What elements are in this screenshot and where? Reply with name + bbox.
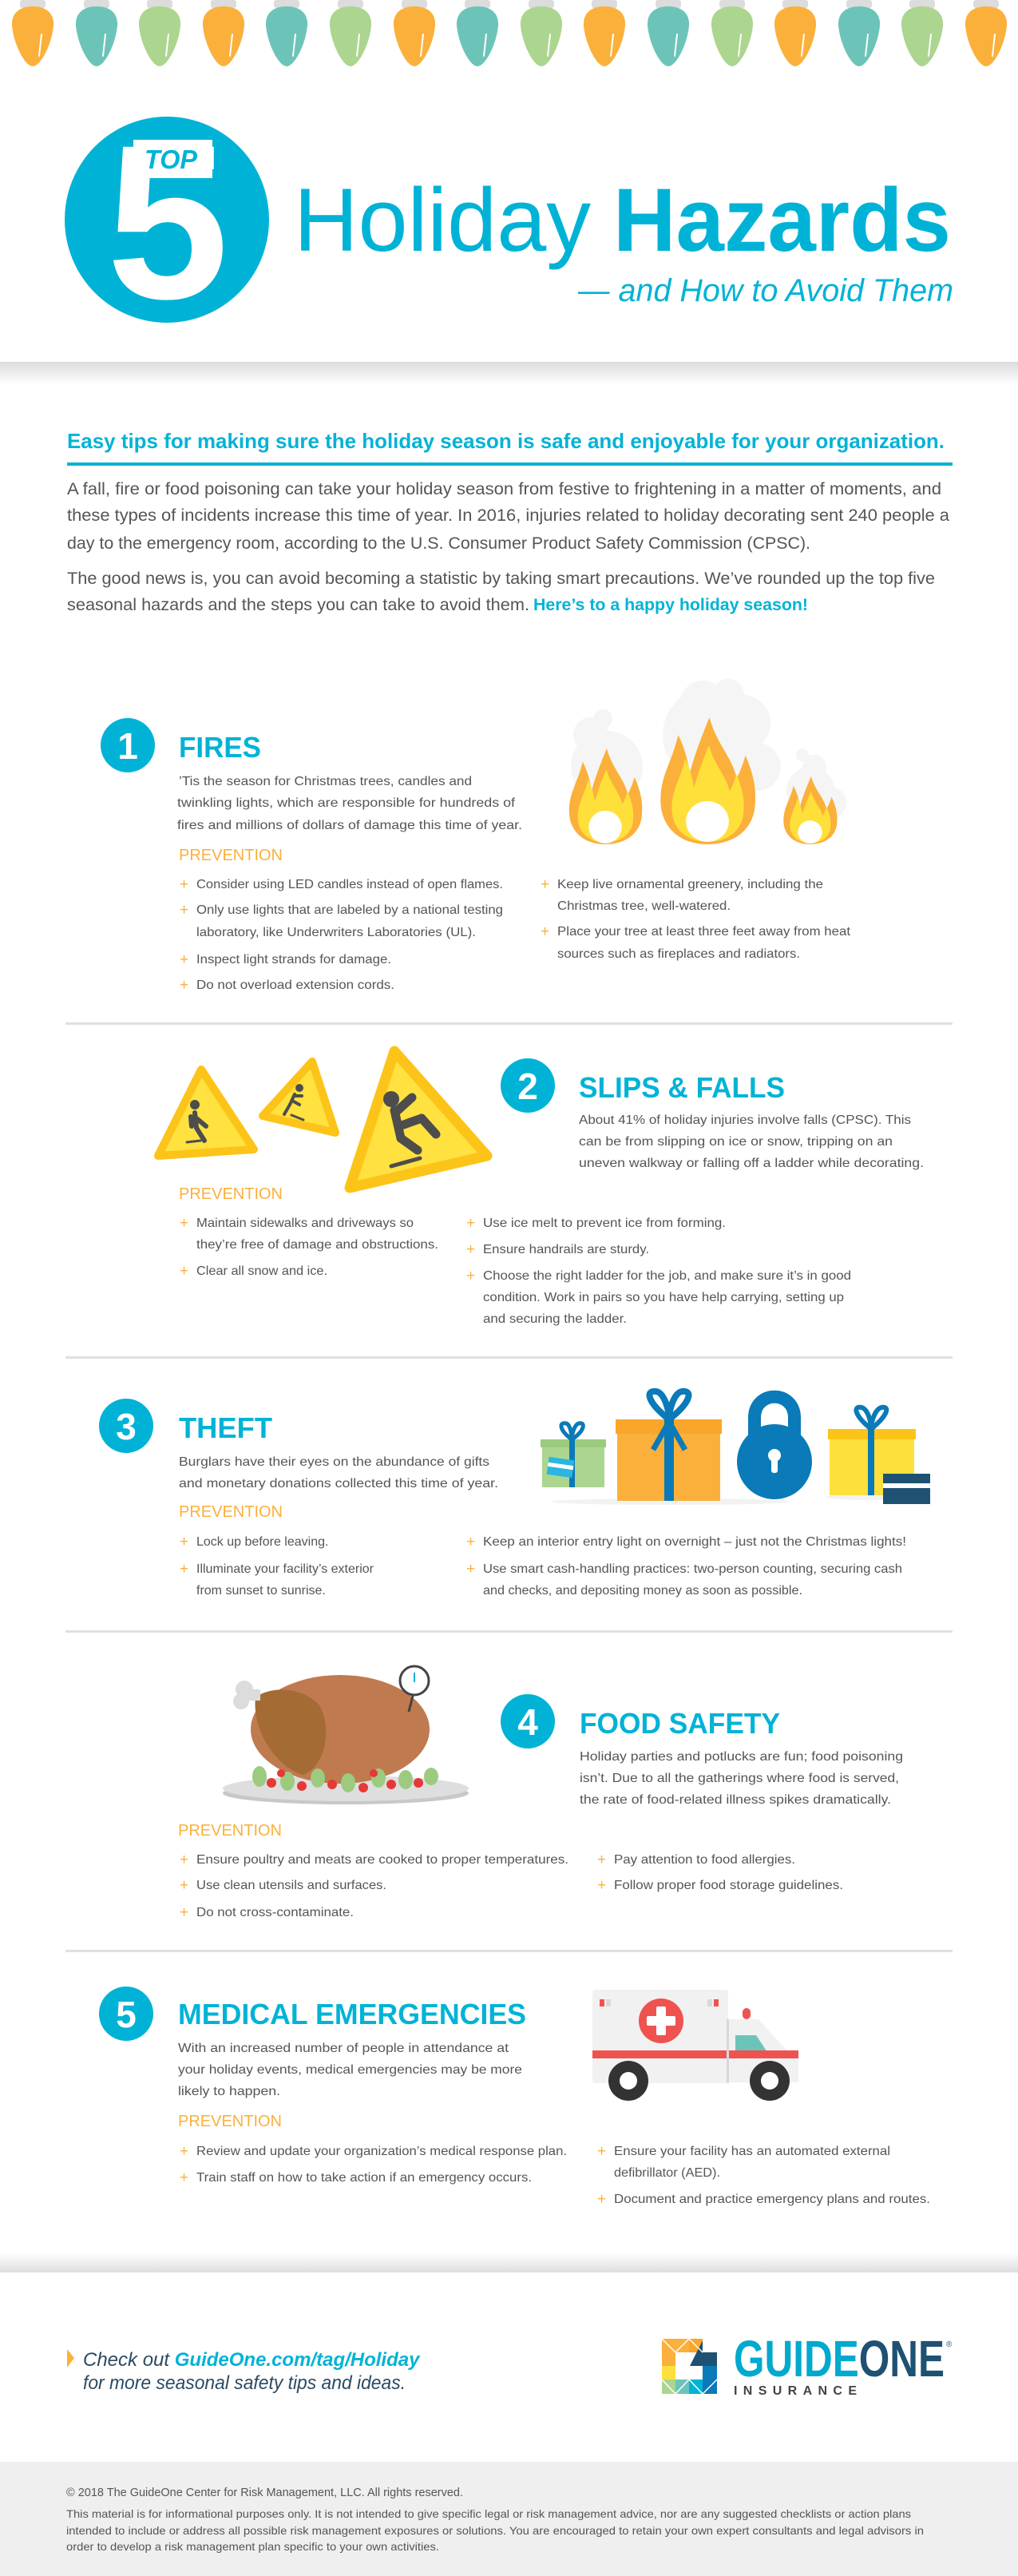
prevention label: food: PREVENTION xyxy=(178,1822,282,1840)
prevention list: theft left: from sunset to sunrise. xyxy=(196,1584,326,1598)
callout: website link xyxy=(67,2349,421,2394)
heading: fires: FIRES xyxy=(179,731,261,764)
prevention list: slips left xyxy=(180,1215,438,1280)
prevention list: fires left: Only use lights that are labeled by a national testing xyxy=(196,903,503,917)
logo badge: top 5 circle: TOP xyxy=(145,145,198,174)
logo: GuideOne Insurance xyxy=(662,2330,953,2398)
prevention list: fires left: Consider using LED candles instead of open flames. xyxy=(196,878,503,891)
prevention list: food right: + xyxy=(597,1852,606,1868)
prevention label: fires: PREVENTION xyxy=(179,847,283,864)
intro paragraph 2 xyxy=(67,570,935,614)
prevention list: fires right: + xyxy=(541,923,549,940)
intro paragraph 1: these types of incidents increase this time of year. In 2016, injuries related to holiday decorating sent 240 people a xyxy=(67,506,949,525)
prevention list: fires left: + xyxy=(180,876,188,893)
intro paragraph 1: day to the emergency room, according to the U.S. Consumer Product Safety Commission (CPSC). xyxy=(67,534,810,553)
description: fires: fires and millions of dollars of damage this time of year. xyxy=(177,819,522,832)
description: fires: twinkling lights, which are responsible for hundreds of xyxy=(177,796,516,810)
description: slips: can be from slipping on ice or snow, tripping on an xyxy=(579,1135,893,1149)
description: theft: Burglars have their eyes on the abundance of gifts xyxy=(179,1455,489,1469)
description: fires xyxy=(177,775,522,832)
footer: legal disclaimer: intended to include or address all possible risk management exposures or solutions. You are encouraged to retain your own expert consultants and legal advisors in xyxy=(66,2524,924,2537)
prevention list: food left: Do not cross-contaminate. xyxy=(196,1906,354,1919)
prevention list: medical left: + xyxy=(180,2143,188,2160)
prevention list: fires right xyxy=(541,876,851,961)
prevention list: fires left xyxy=(180,876,503,994)
description: slips xyxy=(579,1113,924,1170)
number badge 4: 4 xyxy=(517,1701,538,1743)
description: theft: and monetary donations collected this time of year. xyxy=(179,1477,498,1490)
prevention list: theft left: + xyxy=(180,1534,188,1550)
prevention list: medical right: + xyxy=(597,2191,606,2208)
prevention list: food left: + xyxy=(180,1877,188,1894)
number badge 3: 3 xyxy=(116,1406,137,1447)
description: fires: ’Tis the season for Christmas trees, candles and xyxy=(179,775,472,788)
prevention list: slips left: + xyxy=(180,1215,188,1232)
number badge 5: 5 xyxy=(116,1994,137,2035)
footer: legal disclaimer: © 2018 The GuideOne Center for Risk Management, LLC. All rights reserved. xyxy=(66,2486,463,2499)
number badge 2: 2 xyxy=(517,1066,538,1107)
prevention list: fires right: sources such as fireplaces and radiators. xyxy=(557,947,800,961)
prevention label: slips: PREVENTION xyxy=(179,1185,283,1203)
prevention list: theft right: Keep an interior entry light on overnight – just not the Christmas lights! xyxy=(483,1535,906,1549)
panel: 1 fires xyxy=(101,679,851,994)
number badge 3 xyxy=(99,1399,153,1453)
description: slips: About 41% of holiday injuries involve falls (CPSC). This xyxy=(579,1113,911,1127)
prevention list: slips right: + xyxy=(466,1241,475,1258)
intro paragraph 2: The good news is, you can avoid becoming a statistic by taking smart precautions. We’ve rounded up the top five xyxy=(67,570,935,588)
prevention list: fires right: Place your tree at least three feet away from heat xyxy=(557,925,851,939)
intro paragraph 2: seasonal hazards and the steps you can take to avoid them. xyxy=(67,596,529,614)
prevention list: food left xyxy=(180,1852,568,1921)
logo badge: top 5 circle: 5 xyxy=(107,100,228,345)
prevention list: medical right: Document and practice emergency plans and routes. xyxy=(614,2193,930,2206)
prevention list: slips left: + xyxy=(180,1263,188,1280)
prevention list: food right: Follow proper food storage guidelines. xyxy=(614,1879,843,1892)
prevention list: slips right xyxy=(466,1215,851,1326)
description: medical xyxy=(178,2042,522,2098)
prevention list: theft right xyxy=(466,1534,906,1598)
icon: gifts and padlock xyxy=(541,1391,930,1505)
prevention list: theft left: Lock up before leaving. xyxy=(196,1535,328,1549)
heading: food safety: FOOD SAFETY xyxy=(580,1707,780,1740)
prevention list: slips right: + xyxy=(466,1268,475,1284)
prevention list: medical left: Train staff on how to take action if an emergency occurs. xyxy=(196,2171,532,2185)
logo badge: top 5 circle xyxy=(65,100,269,345)
prevention list: theft left xyxy=(180,1534,374,1598)
description: medical: likely to happen. xyxy=(178,2085,280,2098)
prevention list: food right xyxy=(597,1852,843,1894)
prevention list: slips left: Clear all snow and ice. xyxy=(196,1264,327,1278)
heading: theft: THEFT xyxy=(179,1411,272,1444)
prevention list: fires right: Christmas tree, well-watered. xyxy=(557,899,731,913)
description: food: isn’t. Due to all the gatherings where food is served, xyxy=(580,1772,899,1785)
prevention list: medical right: defibrillator (AED). xyxy=(614,2166,720,2180)
icon: ambulance xyxy=(592,1990,798,2101)
number badge 2 xyxy=(501,1058,555,1113)
prevention list: fires left: + xyxy=(180,951,188,968)
prevention label: medical: PREVENTION xyxy=(178,2113,282,2130)
description: food: the rate of food-related illness spikes dramatically. xyxy=(580,1793,891,1807)
prevention list: fires right: + xyxy=(541,876,549,893)
title: Holiday xyxy=(294,170,591,270)
panel: 5 medical emergencies xyxy=(99,1987,930,2208)
prevention list: food left: Ensure poultry and meats are cooked to proper temperatures. xyxy=(196,1853,568,1867)
footer: legal disclaimer: order to develop a risk management plan specific to your own activities. xyxy=(66,2540,439,2553)
prevention list: food left: + xyxy=(180,1852,188,1868)
prevention list: slips right: and securing the ladder. xyxy=(483,1312,627,1326)
intro paragraph 2: Here’s to a happy holiday season! xyxy=(533,596,808,614)
intro paragraph 1: A fall, fire or food poisoning can take your holiday season from festive to frightening in a matter of moments, and xyxy=(67,480,941,498)
prevention list: theft left: Illuminate your facility’s exterior xyxy=(196,1562,374,1576)
prevention list: food right: + xyxy=(597,1877,606,1894)
icon: roast turkey xyxy=(223,1666,469,1804)
icon: warning signs xyxy=(158,1051,487,1188)
description: medical: your holiday events, medical emergencies may be more xyxy=(178,2063,522,2077)
prevention list: theft right: + xyxy=(466,1561,475,1578)
footer: legal disclaimer xyxy=(0,2462,1018,2576)
intro heading xyxy=(67,429,953,466)
prevention list: fires left: + xyxy=(180,977,188,994)
prevention list: fires left: + xyxy=(180,902,188,919)
number badge 1 xyxy=(101,718,155,772)
header: string of holiday lights xyxy=(12,0,1007,66)
subtitle: — and How to Avoid Them xyxy=(577,273,953,308)
number badge 1: 1 xyxy=(117,725,138,767)
number badge 5 xyxy=(99,1987,153,2041)
callout: website link: Check out GuideOne.com/tag/Holiday xyxy=(83,2349,421,2371)
title: Hazards xyxy=(613,170,951,270)
prevention list: medical left: + xyxy=(180,2169,188,2186)
prevention list: theft left: + xyxy=(180,1561,188,1578)
prevention list: slips right: Ensure handrails are sturdy. xyxy=(483,1243,649,1256)
heading: medical emergencies: MEDICAL EMERGENCIES xyxy=(178,1998,526,2030)
heading: slips and falls: SLIPS & FALLS xyxy=(579,1071,785,1104)
prevention list: slips right: condition. Work in pairs so you have help carrying, setting up xyxy=(483,1291,844,1304)
prevention list: medical right: + xyxy=(597,2143,606,2160)
prevention label: theft: PREVENTION xyxy=(179,1503,283,1521)
prevention list: theft right: Use smart cash-handling practices: two-person counting, securing cash xyxy=(483,1562,902,1576)
description: food: Holiday parties and potlucks are fun; food poisoning xyxy=(580,1750,903,1764)
logo: GuideOne Insurance: GUIDEONE xyxy=(734,2330,945,2387)
panel: 2 slips and falls xyxy=(158,1051,924,1326)
prevention list: slips right: + xyxy=(466,1215,475,1232)
panel: 4 food safety xyxy=(178,1666,903,1921)
intro paragraph 1 xyxy=(67,480,949,553)
title xyxy=(294,170,951,270)
prevention list: theft right: and checks, and depositing money as soon as possible. xyxy=(483,1584,802,1598)
prevention list: fires left: Inspect light strands for damage. xyxy=(196,953,391,966)
prevention list: food left: Use clean utensils and surfaces. xyxy=(196,1879,386,1892)
logo: GuideOne Insurance: ® xyxy=(946,2340,953,2349)
prevention list: medical right: Ensure your facility has an automated external xyxy=(614,2145,890,2158)
description: slips: uneven walkway or falling off a ladder while decorating. xyxy=(579,1157,924,1170)
prevention list: food left: + xyxy=(180,1904,188,1921)
prevention list: food right: Pay attention to food allergies. xyxy=(614,1853,795,1867)
footer: legal disclaimer: This material is for informational purposes only. It is not intended to give specific legal or risk management advice, nor are any suggested checklists or action plans xyxy=(66,2507,911,2520)
prevention list: fires left: laboratory, like Underwriters Laboratories (UL). xyxy=(196,926,476,939)
description: food xyxy=(580,1750,903,1807)
prevention list: slips left: they’re free of damage and obstructions. xyxy=(196,1238,438,1252)
description: medical: With an increased number of people in attendance at xyxy=(178,2042,509,2055)
icon: flames with smoke xyxy=(569,679,846,844)
prevention list: medical right xyxy=(597,2143,930,2208)
prevention list: theft right: + xyxy=(466,1534,475,1550)
number badge 4 xyxy=(501,1694,555,1748)
intro heading: Easy tips for making sure the holiday season is safe and enjoyable for your organization. xyxy=(67,429,945,453)
prevention list: fires left: Do not overload extension cords. xyxy=(196,978,394,992)
prevention list: slips right: Use ice melt to prevent ice from forming. xyxy=(483,1217,726,1230)
description: theft xyxy=(179,1455,498,1490)
prevention list: fires right: Keep live ornamental greenery, including the xyxy=(557,878,823,891)
prevention list: medical left xyxy=(180,2143,567,2186)
prevention list: slips right: Choose the right ladder for the job, and make sure it’s in good xyxy=(483,1269,851,1283)
prevention list: slips left: Maintain sidewalks and driveways so xyxy=(196,1217,414,1230)
panel: 3 theft xyxy=(99,1391,930,1598)
prevention list: medical left: Review and update your organization’s medical response plan. xyxy=(196,2145,567,2158)
callout: website link: for more seasonal safety tips and ideas. xyxy=(83,2372,406,2394)
logo: GuideOne Insurance: INSURANCE xyxy=(734,2384,857,2398)
